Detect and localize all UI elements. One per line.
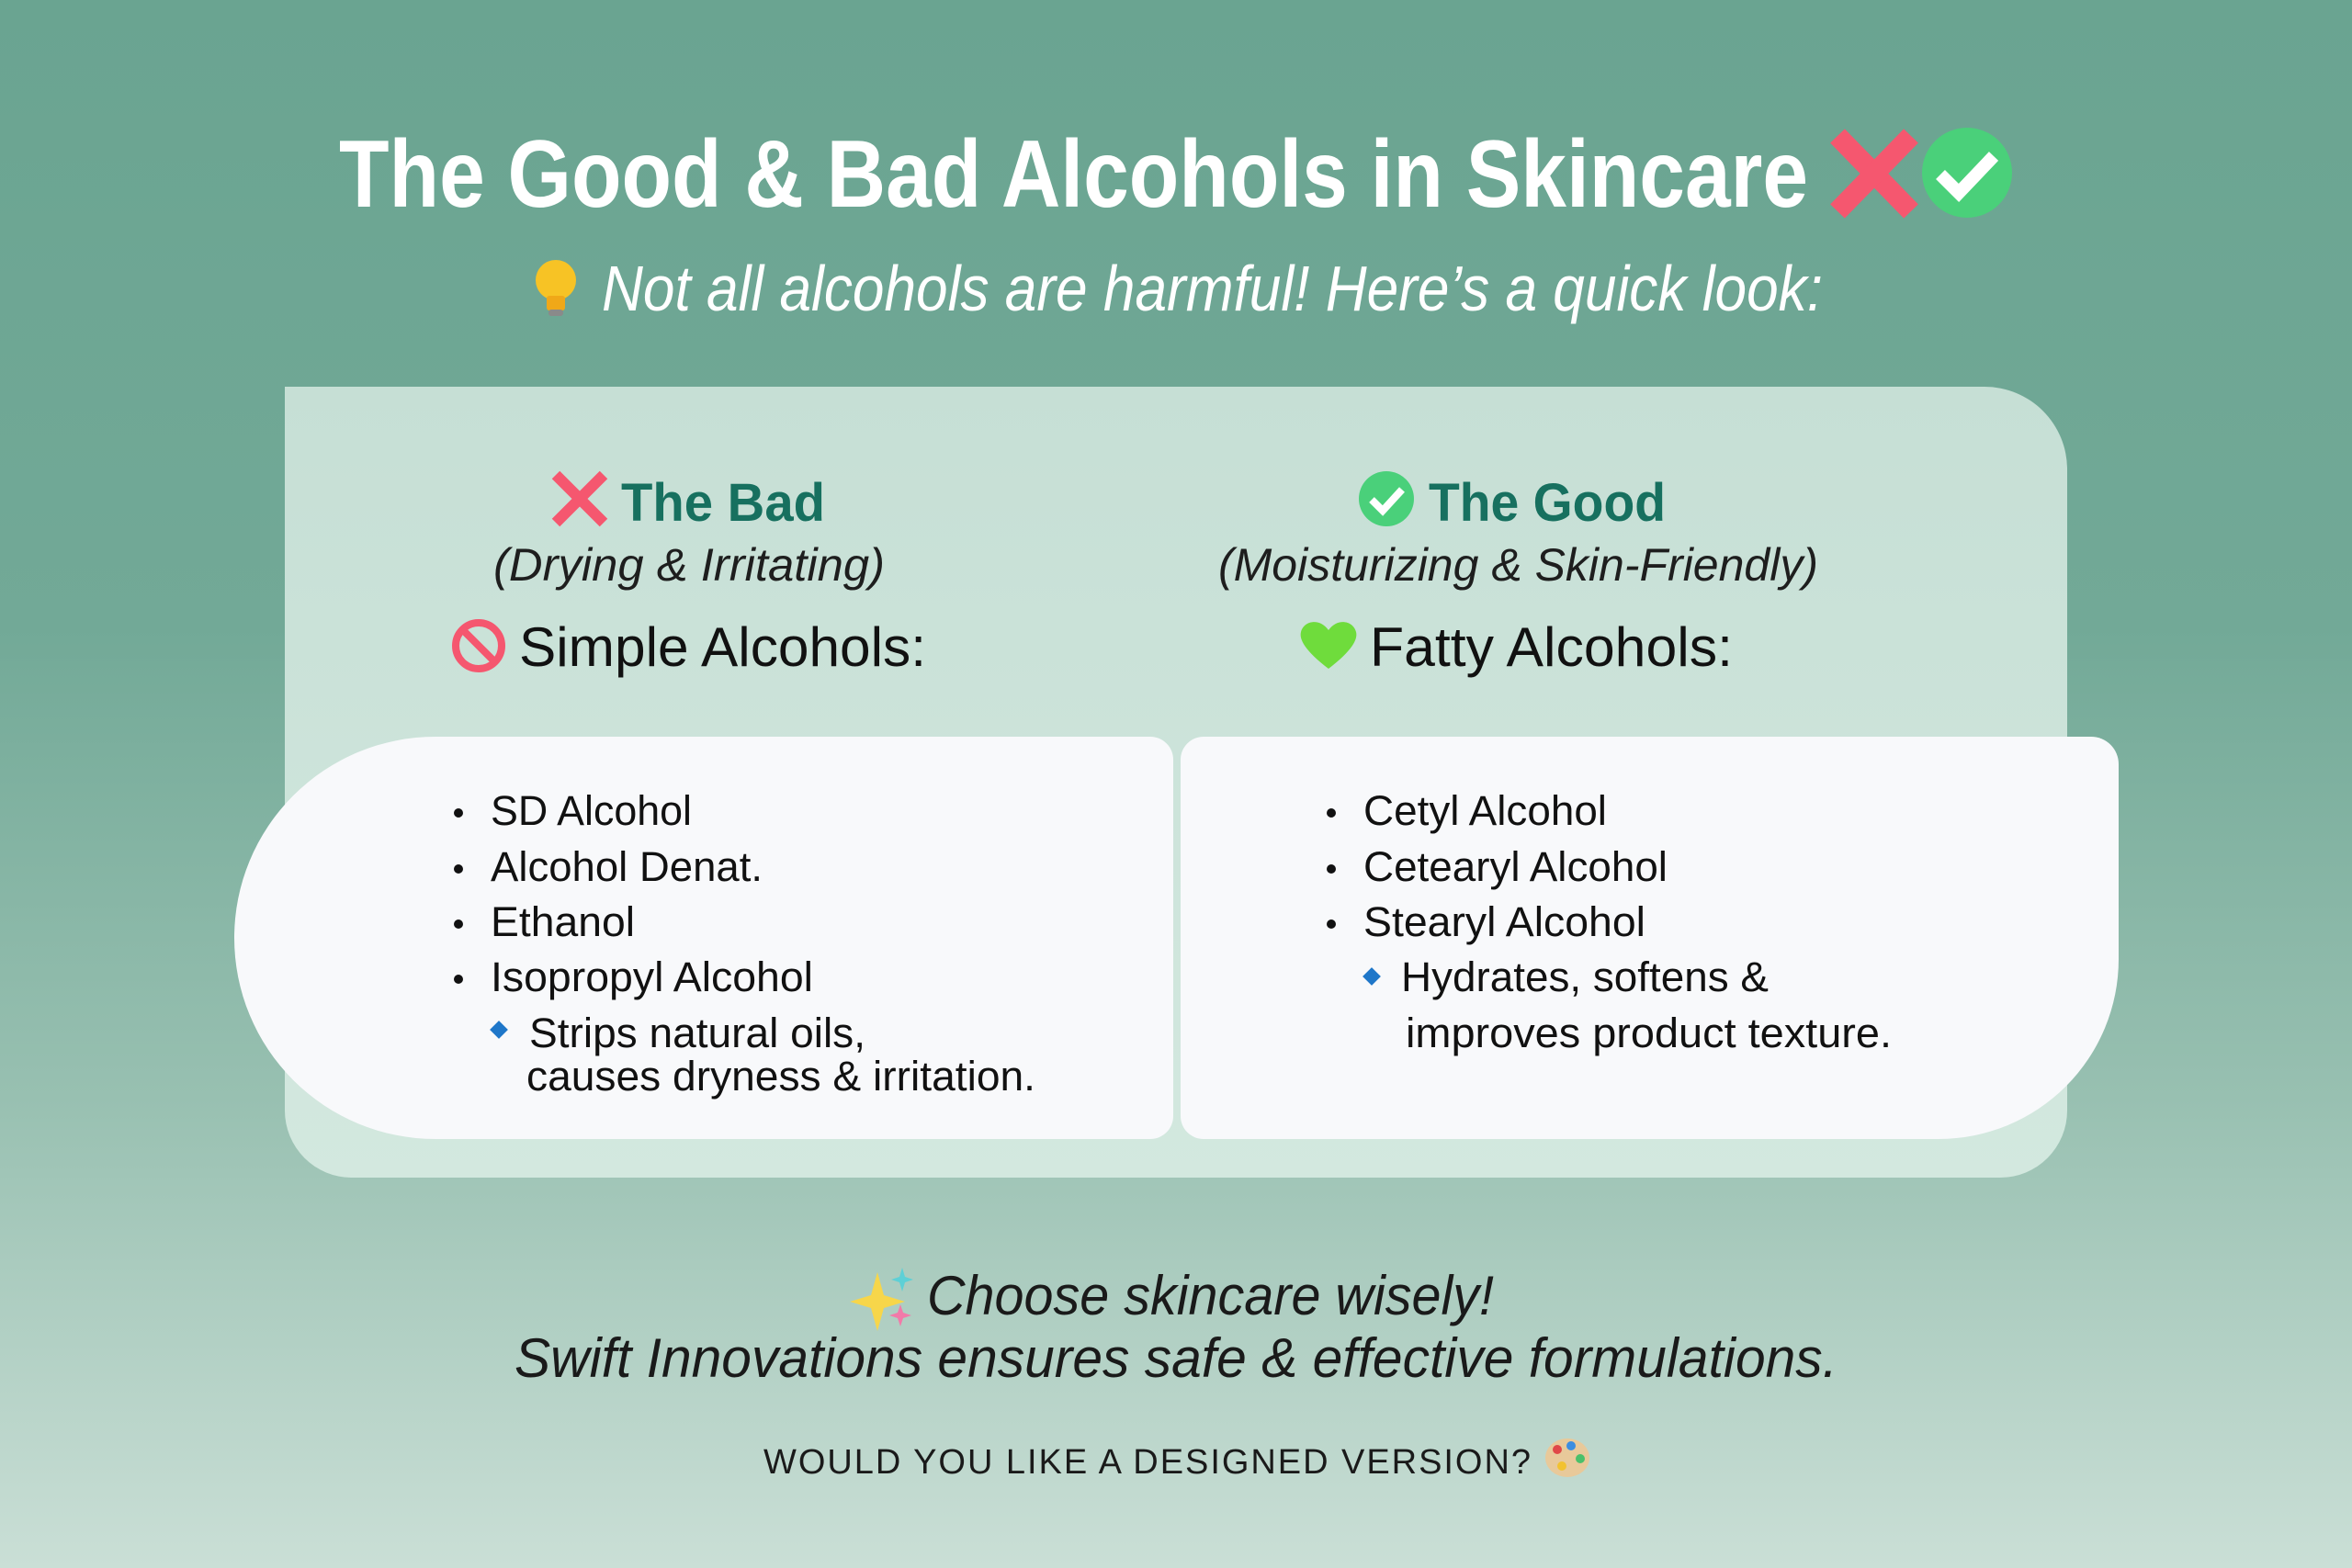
card: good list: Cetyl Alcohol [1363,787,1607,834]
card: good list [1181,737,2119,1139]
card: good list: Stearyl Alcohol [1363,898,1645,945]
heading: the bad: Simple Alcohols: [519,616,926,678]
heading: the good: The Good [1429,473,1666,533]
card: good list: Cetearyl Alcohol [1363,843,1668,890]
icon: palette [1545,1438,1589,1477]
panel: comparison [234,387,2119,1178]
footer question: WOULD YOU LIKE A DESIGNED VERSION? [763,1443,1531,1482]
card: good list: Hydrates, softens & [1401,953,1769,1000]
icon: sparkles [850,1268,913,1331]
heading: the good: (Moisturizing & Skin-Friendly) [1218,539,1818,591]
icon: light bulb [536,260,576,316]
card: bad list: causes dryness & irritation. [526,1053,1035,1100]
card: bad list: SD Alcohol [491,787,692,834]
card: bad list: Isopropyl Alcohol [491,953,813,1000]
subtitle: Not all alcohols are harmful! Here’s a quick look: [602,253,1823,324]
footer message [514,1265,1838,1389]
card: bad list: Ethanol [491,898,635,945]
card: bad list [234,737,1173,1139]
card: bad list: Alcohol Denat. [491,843,763,890]
heading: the bad [456,473,926,678]
icon: green check [1922,128,2012,218]
heading: the good: Fatty Alcohols: [1370,616,1733,678]
card: good list: improves product texture. [1406,1010,1892,1056]
footer message: Choose skincare wisely! [927,1265,1494,1326]
card: bad list: Strips natural oils, [529,1010,865,1056]
footer message: Swift Innovations ensures safe & effective formulations. [514,1327,1838,1389]
heading: the bad: The Bad [621,473,825,533]
title: The Good & Bad Alcohols in Skincare [339,121,1808,228]
heading: the bad: (Drying & Irritating) [493,539,885,591]
icon: red cross [1838,136,1911,211]
heading: the good [1218,471,1818,678]
